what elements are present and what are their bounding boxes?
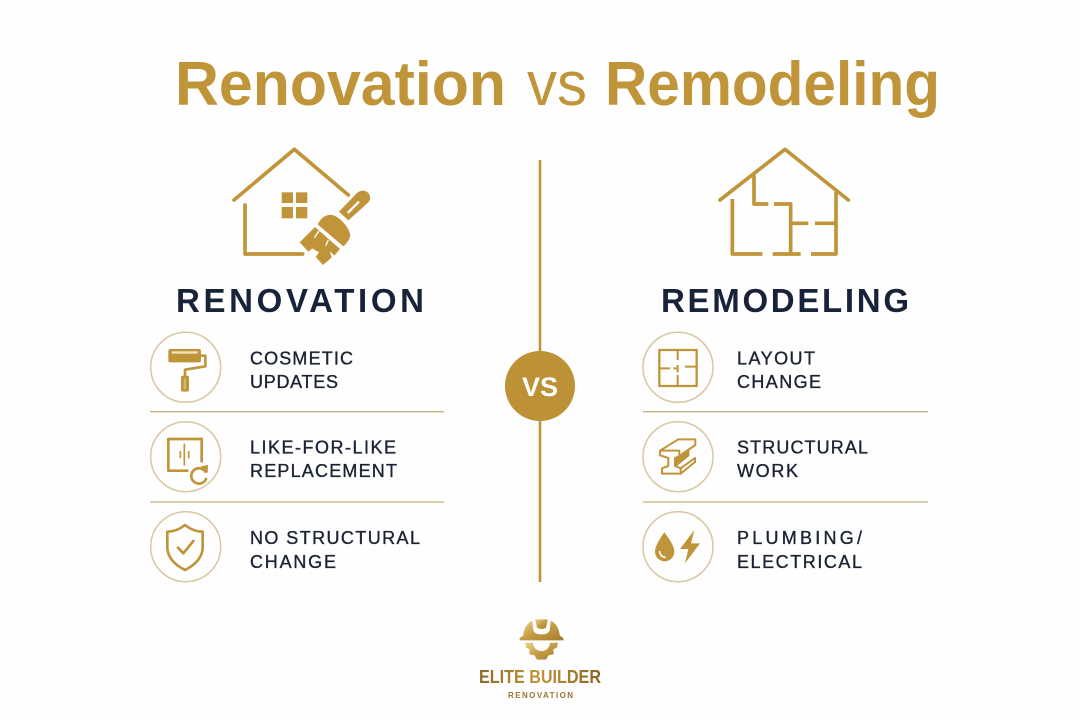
icon: water drop and lightning bolt — [655, 530, 700, 563]
icon: steel I-beam — [660, 439, 695, 474]
title: vs — [527, 50, 587, 119]
item: layout change: LAYOUT — [737, 348, 815, 368]
logo: elite builder renovation: RENOVATION — [508, 691, 573, 700]
item: layout change — [643, 332, 821, 402]
logo: elite builder renovation — [479, 619, 601, 700]
panel: remodeling — [643, 149, 928, 582]
item: like-for-like replacement: REPLACEMENT — [250, 461, 397, 481]
item: no structural change: CHANGE — [250, 552, 336, 572]
item: structural work: STRUCTURAL — [737, 438, 868, 458]
heading: remodeling: REMODELING — [661, 282, 909, 319]
icon: house with paint brush — [234, 149, 370, 265]
item: cosmetic updates — [151, 332, 353, 402]
center divider line — [539, 160, 541, 582]
item: layout change: CHANGE — [737, 372, 821, 392]
panel: renovation — [150, 149, 444, 582]
icon: shield with check — [167, 525, 203, 570]
title: Renovation — [175, 50, 506, 119]
item: cosmetic updates: UPDATES — [250, 372, 338, 392]
title — [175, 50, 940, 119]
icon: door with refresh arrow — [168, 439, 208, 484]
VS badge — [505, 351, 575, 421]
item: structural work: WORK — [737, 461, 798, 481]
logo: elite builder renovation: ELITE BUILDER — [479, 667, 601, 687]
heading: renovation: RENOVATION — [176, 282, 424, 319]
item: like-for-like replacement — [151, 422, 397, 492]
item: no structural change: NO STRUCTURAL — [250, 528, 420, 548]
VS badge: VS — [522, 372, 558, 402]
icon: helmet and gear — [520, 619, 563, 660]
icon: house floor plan — [720, 149, 848, 254]
item: no structural change — [151, 512, 420, 582]
item: cosmetic updates: COSMETIC — [250, 348, 353, 368]
item: plumbing and electrical — [643, 512, 862, 582]
icon: paint roller — [168, 349, 205, 392]
title: Remodeling — [605, 50, 940, 119]
item: like-for-like replacement: LIKE-FOR-LIKE — [250, 438, 396, 458]
icon: floor layout — [659, 350, 697, 386]
item: plumbing and electrical: ELECTRICAL — [737, 552, 862, 572]
item: structural work — [643, 422, 868, 492]
item: plumbing and electrical: PLUMBING/ — [737, 528, 862, 548]
